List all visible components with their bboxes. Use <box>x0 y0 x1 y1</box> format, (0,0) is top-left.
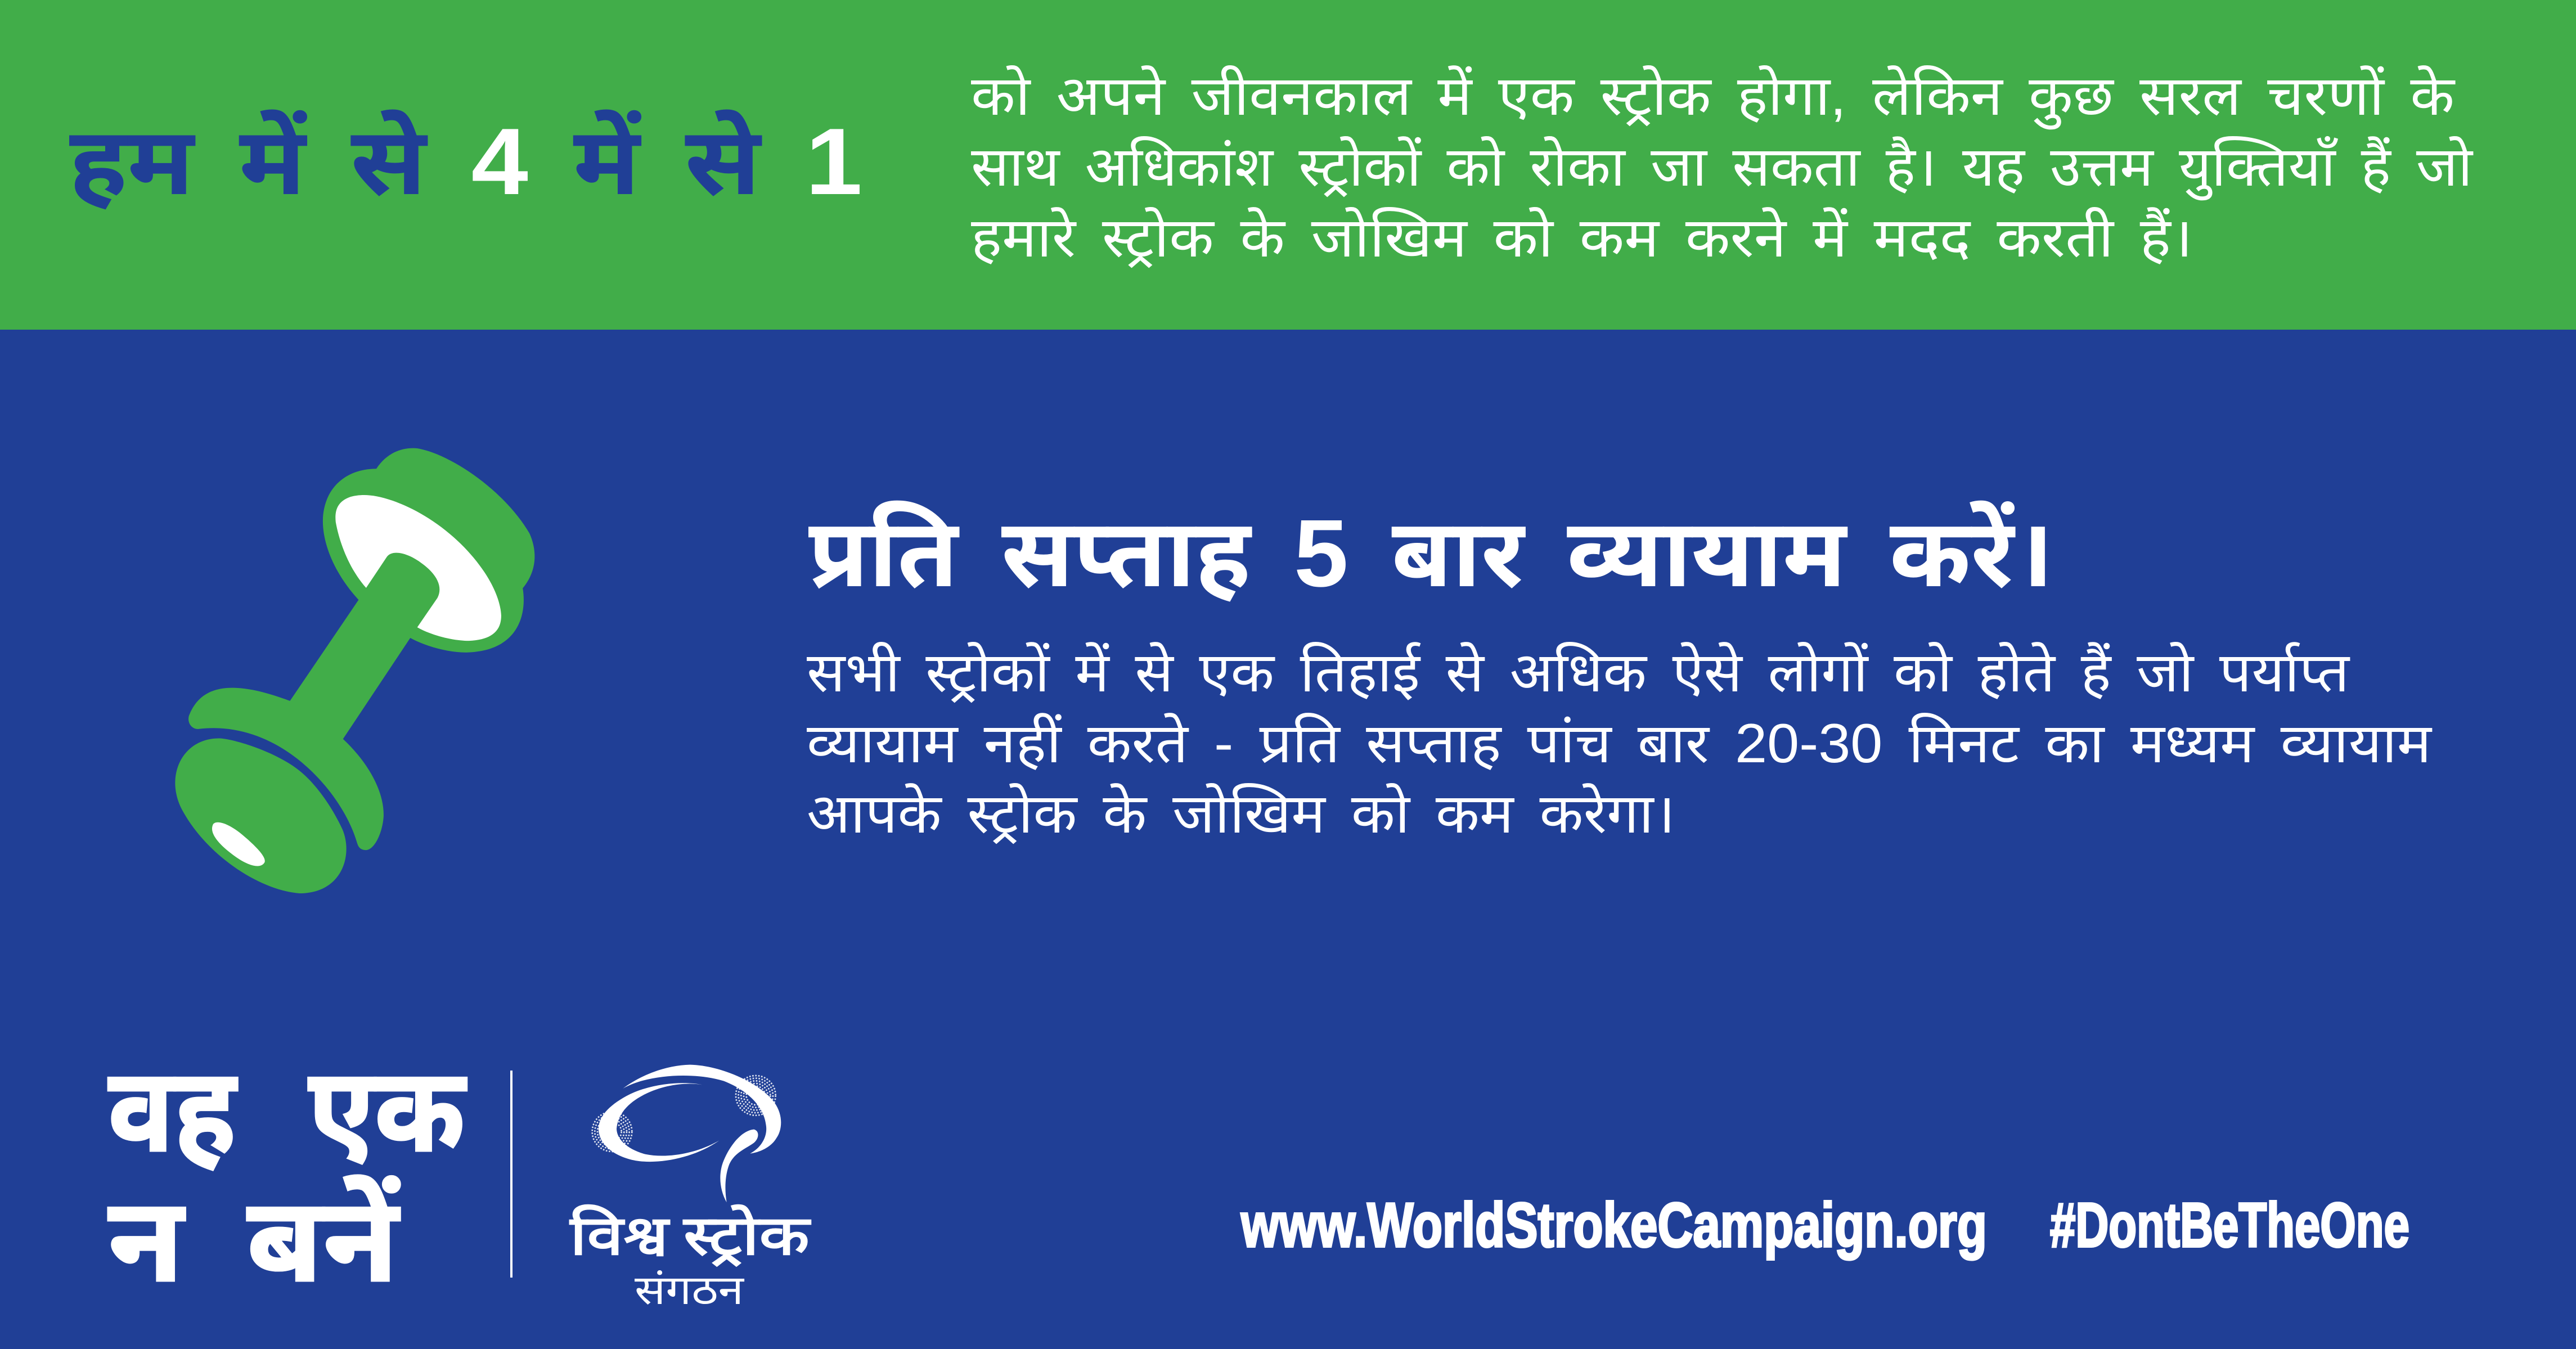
panel: green header band <box>0 0 2576 330</box>
text block: header intro: को अपने जीवनकाल में एक स्ट्रोक होगा, लेकिन कुछ सरल चरणों के <box>971 65 2456 130</box>
hashtag: #DontBeTheOne <box>2050 1190 2409 1260</box>
tagline: don't be the one: न बनें <box>108 1174 401 1306</box>
divider <box>510 1071 512 1278</box>
logo text: world stroke: विश्व स्ट्रोक <box>570 1204 811 1266</box>
text block: exercise body <box>807 641 2432 844</box>
text block: header intro <box>971 65 2474 268</box>
text block: exercise body: आपके स्ट्रोक के जोखिम को कम करेगा। <box>807 783 1675 844</box>
link: campaign website: www.WorldStrokeCampaign.org <box>1240 1190 1987 1260</box>
logo: World Stroke Organization <box>570 1065 811 1313</box>
tagline: don't be the one: वह एक <box>108 1044 467 1176</box>
logo text: organization: संगठन <box>635 1268 744 1313</box>
tagline: don't be the one <box>108 1044 467 1306</box>
text block: exercise body: सभी स्ट्रोकों में से एक तिहाई से अधिक ऐसे लोगों को होते हैं जो पर्याप्त <box>807 641 2350 703</box>
icon: logo swoosh <box>592 1065 781 1202</box>
heading: one in four: हम में से 4 में से 1 <box>69 109 862 214</box>
text block: header intro: हमारे स्ट्रोक के जोखिम को कम करने में मदद करती हैं। <box>971 206 2193 268</box>
text block: exercise body: व्यायाम नहीं करते - प्रति सप्ताह पांच बार 20-30 मिनट का मध्यम व्यायाम <box>807 712 2432 774</box>
heading: exercise five times a week: प्रति सप्ताह 5 बार व्यायाम करें। <box>808 500 2053 607</box>
icon: dumbbell <box>175 448 534 893</box>
text block: header intro: साथ अधिकांश स्ट्रोकों को रोका जा सकता है। यह उत्तम युक्तियाँ हैं जो <box>971 136 2474 201</box>
